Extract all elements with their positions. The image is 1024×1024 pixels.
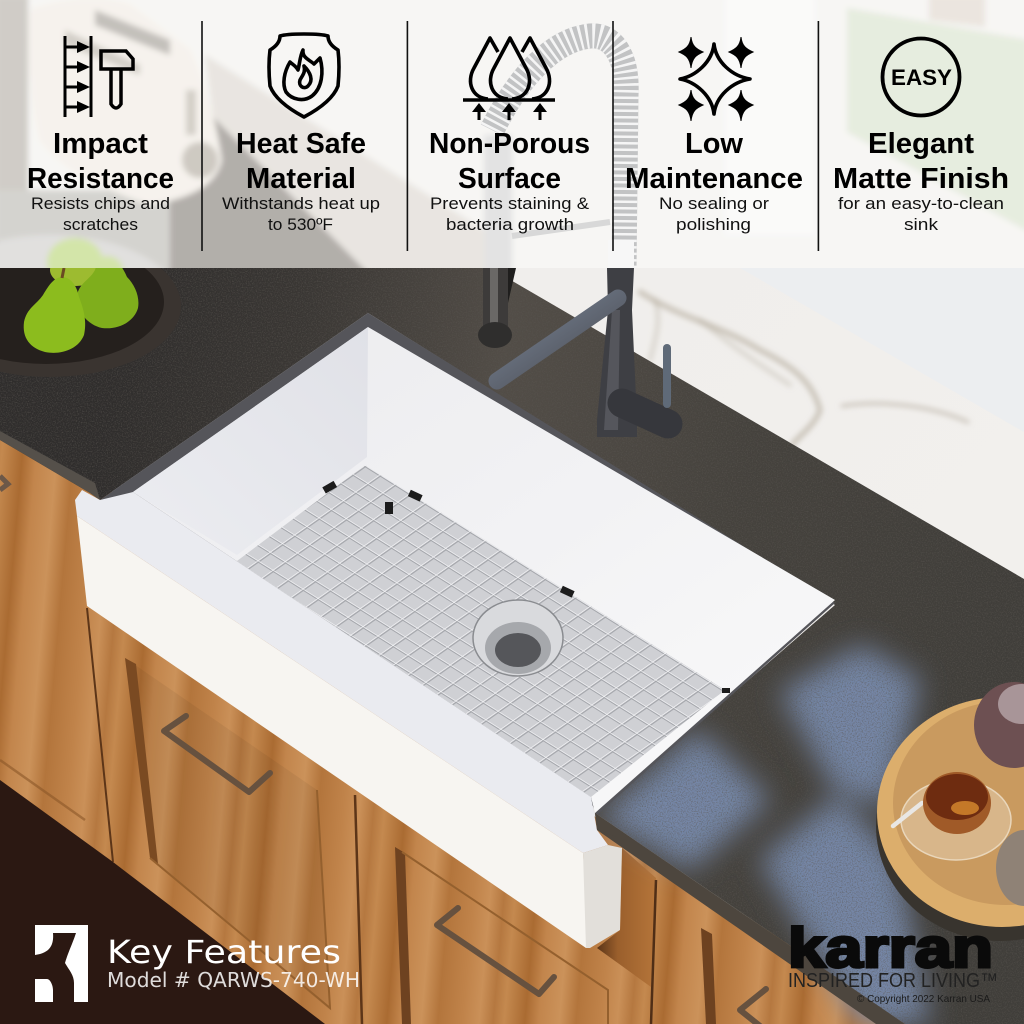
tea saucer, cup and spoon xyxy=(893,772,1011,860)
divider 4 xyxy=(818,21,819,251)
text: finish description: for an easy-to-clean xyxy=(838,194,1004,213)
text: heat description: Withstands heat up xyxy=(222,194,380,213)
icon: brand mark xyxy=(35,925,88,1002)
center door xyxy=(125,658,362,1024)
left cabinet handle xyxy=(0,476,8,490)
countertop xyxy=(0,268,1024,1024)
footer: key features block xyxy=(35,925,360,1002)
sprayer base xyxy=(483,268,508,326)
copyright: © Copyright 2022 Karran USA xyxy=(857,993,990,1005)
heading: heat safe material: Heat Safe xyxy=(236,128,366,160)
text: maintenance description xyxy=(659,194,769,234)
sink back wall xyxy=(133,327,835,813)
text: porous description xyxy=(430,194,590,234)
divider 2 xyxy=(407,21,408,251)
heading: non-porous surface: Non-Porous xyxy=(429,128,590,160)
band faucet spring xyxy=(492,36,626,268)
counter speckle xyxy=(0,268,1024,1024)
lower door xyxy=(395,847,608,1024)
text: impact description: Resists chips and xyxy=(31,194,170,213)
floor xyxy=(0,780,325,1024)
band dark counter xyxy=(168,118,366,268)
heading: impact resistance: Impact xyxy=(53,128,148,160)
faucet body xyxy=(597,268,637,437)
band faucet lower white xyxy=(612,240,634,268)
band pears xyxy=(44,236,104,268)
heading: heat safe material: Material xyxy=(246,163,356,195)
text: maintenance description: polishing xyxy=(676,215,751,234)
pears xyxy=(24,254,138,353)
faucet lever xyxy=(663,344,671,408)
divider 3 xyxy=(612,21,614,251)
sink opening backing xyxy=(100,313,835,815)
apron right end xyxy=(583,845,622,948)
right door xyxy=(651,880,716,1024)
feature 3: non-porous surface xyxy=(429,38,590,234)
heading: elegant matte finish xyxy=(833,128,1009,195)
faucet handle xyxy=(622,403,668,424)
window sill xyxy=(740,268,1024,432)
sink apron xyxy=(75,490,622,948)
counter corner above apron xyxy=(595,813,640,845)
apron front face xyxy=(77,516,590,948)
band plate arc xyxy=(0,235,160,268)
text: heat description xyxy=(222,194,380,234)
text: heat description: to 530ºF xyxy=(268,215,333,234)
band window xyxy=(847,8,1024,232)
heading: impact resistance xyxy=(27,128,174,195)
icon: water drops and arrows xyxy=(463,38,555,120)
heading: heat safe material xyxy=(236,128,366,195)
apron rim top xyxy=(75,490,608,853)
text: model number: Model # QARWS-740-WH xyxy=(107,968,360,992)
icon: easy badge xyxy=(882,38,960,116)
logo tagline: INSPIRED FOR LIVING™ xyxy=(788,970,998,992)
heading: non-porous surface xyxy=(429,128,590,195)
text: finish description xyxy=(838,194,1004,234)
wire grid xyxy=(237,465,725,797)
translucent header panel xyxy=(0,0,1024,268)
feature 5: elegant matte finish xyxy=(833,38,1009,234)
heading: non-porous surface: Surface xyxy=(458,163,561,195)
divider 1 xyxy=(201,21,203,251)
band shelf xyxy=(206,58,484,268)
heading: elegant matte finish: Elegant xyxy=(868,128,974,160)
text: impact description xyxy=(31,194,170,234)
logo wordmark: karran xyxy=(788,916,993,979)
counter front edge right xyxy=(595,813,905,1024)
faucet arm xyxy=(497,298,618,381)
heading: elegant matte finish: Matte Finish xyxy=(833,163,1009,195)
grid clips xyxy=(322,481,730,693)
band backdrop xyxy=(0,0,1024,268)
door handles xyxy=(164,716,766,1024)
counter reflections xyxy=(600,645,930,1024)
wood tray xyxy=(877,697,1024,927)
heading: low maintenance xyxy=(625,128,803,195)
left cabinet lines xyxy=(0,608,113,862)
marble veins xyxy=(640,292,968,445)
band left strip xyxy=(0,0,30,192)
band reflected sink post xyxy=(484,135,512,280)
feature 1: impact resistance xyxy=(27,36,174,234)
band lower left xyxy=(0,188,173,268)
heading: low maintenance: Low xyxy=(685,128,743,160)
tray shadow xyxy=(876,711,1024,941)
heading: impact resistance: Resistance xyxy=(27,163,174,195)
footer: karran logo xyxy=(788,916,998,1005)
text: maintenance description: No sealing or xyxy=(659,194,769,213)
text: porous description: Prevents staining & xyxy=(430,194,590,213)
icon: easy badge: EASY xyxy=(891,65,952,90)
feature 4: low maintenance xyxy=(625,37,803,234)
teapot xyxy=(974,682,1024,768)
band toaster xyxy=(114,117,225,206)
feature 2: heat safe material xyxy=(222,34,380,234)
sink left wall xyxy=(133,327,368,555)
heading: low maintenance: Maintenance xyxy=(625,163,803,195)
text: finish description: sink xyxy=(904,215,939,234)
text: porous description: bacteria growth xyxy=(446,215,574,234)
heading: key features: Key Features xyxy=(107,933,341,971)
side post xyxy=(597,848,656,987)
pear plate xyxy=(0,235,181,377)
wood base for all cabinets xyxy=(0,430,910,1024)
icon: wall and hammer xyxy=(65,36,133,117)
icon: shield with flame xyxy=(269,34,339,117)
text: impact description: scratches xyxy=(63,215,138,234)
drain strainer xyxy=(473,600,563,676)
faucet xyxy=(478,268,671,437)
counter front edge left xyxy=(0,431,100,500)
icon: sparkles xyxy=(679,37,753,121)
small glass xyxy=(996,830,1024,906)
